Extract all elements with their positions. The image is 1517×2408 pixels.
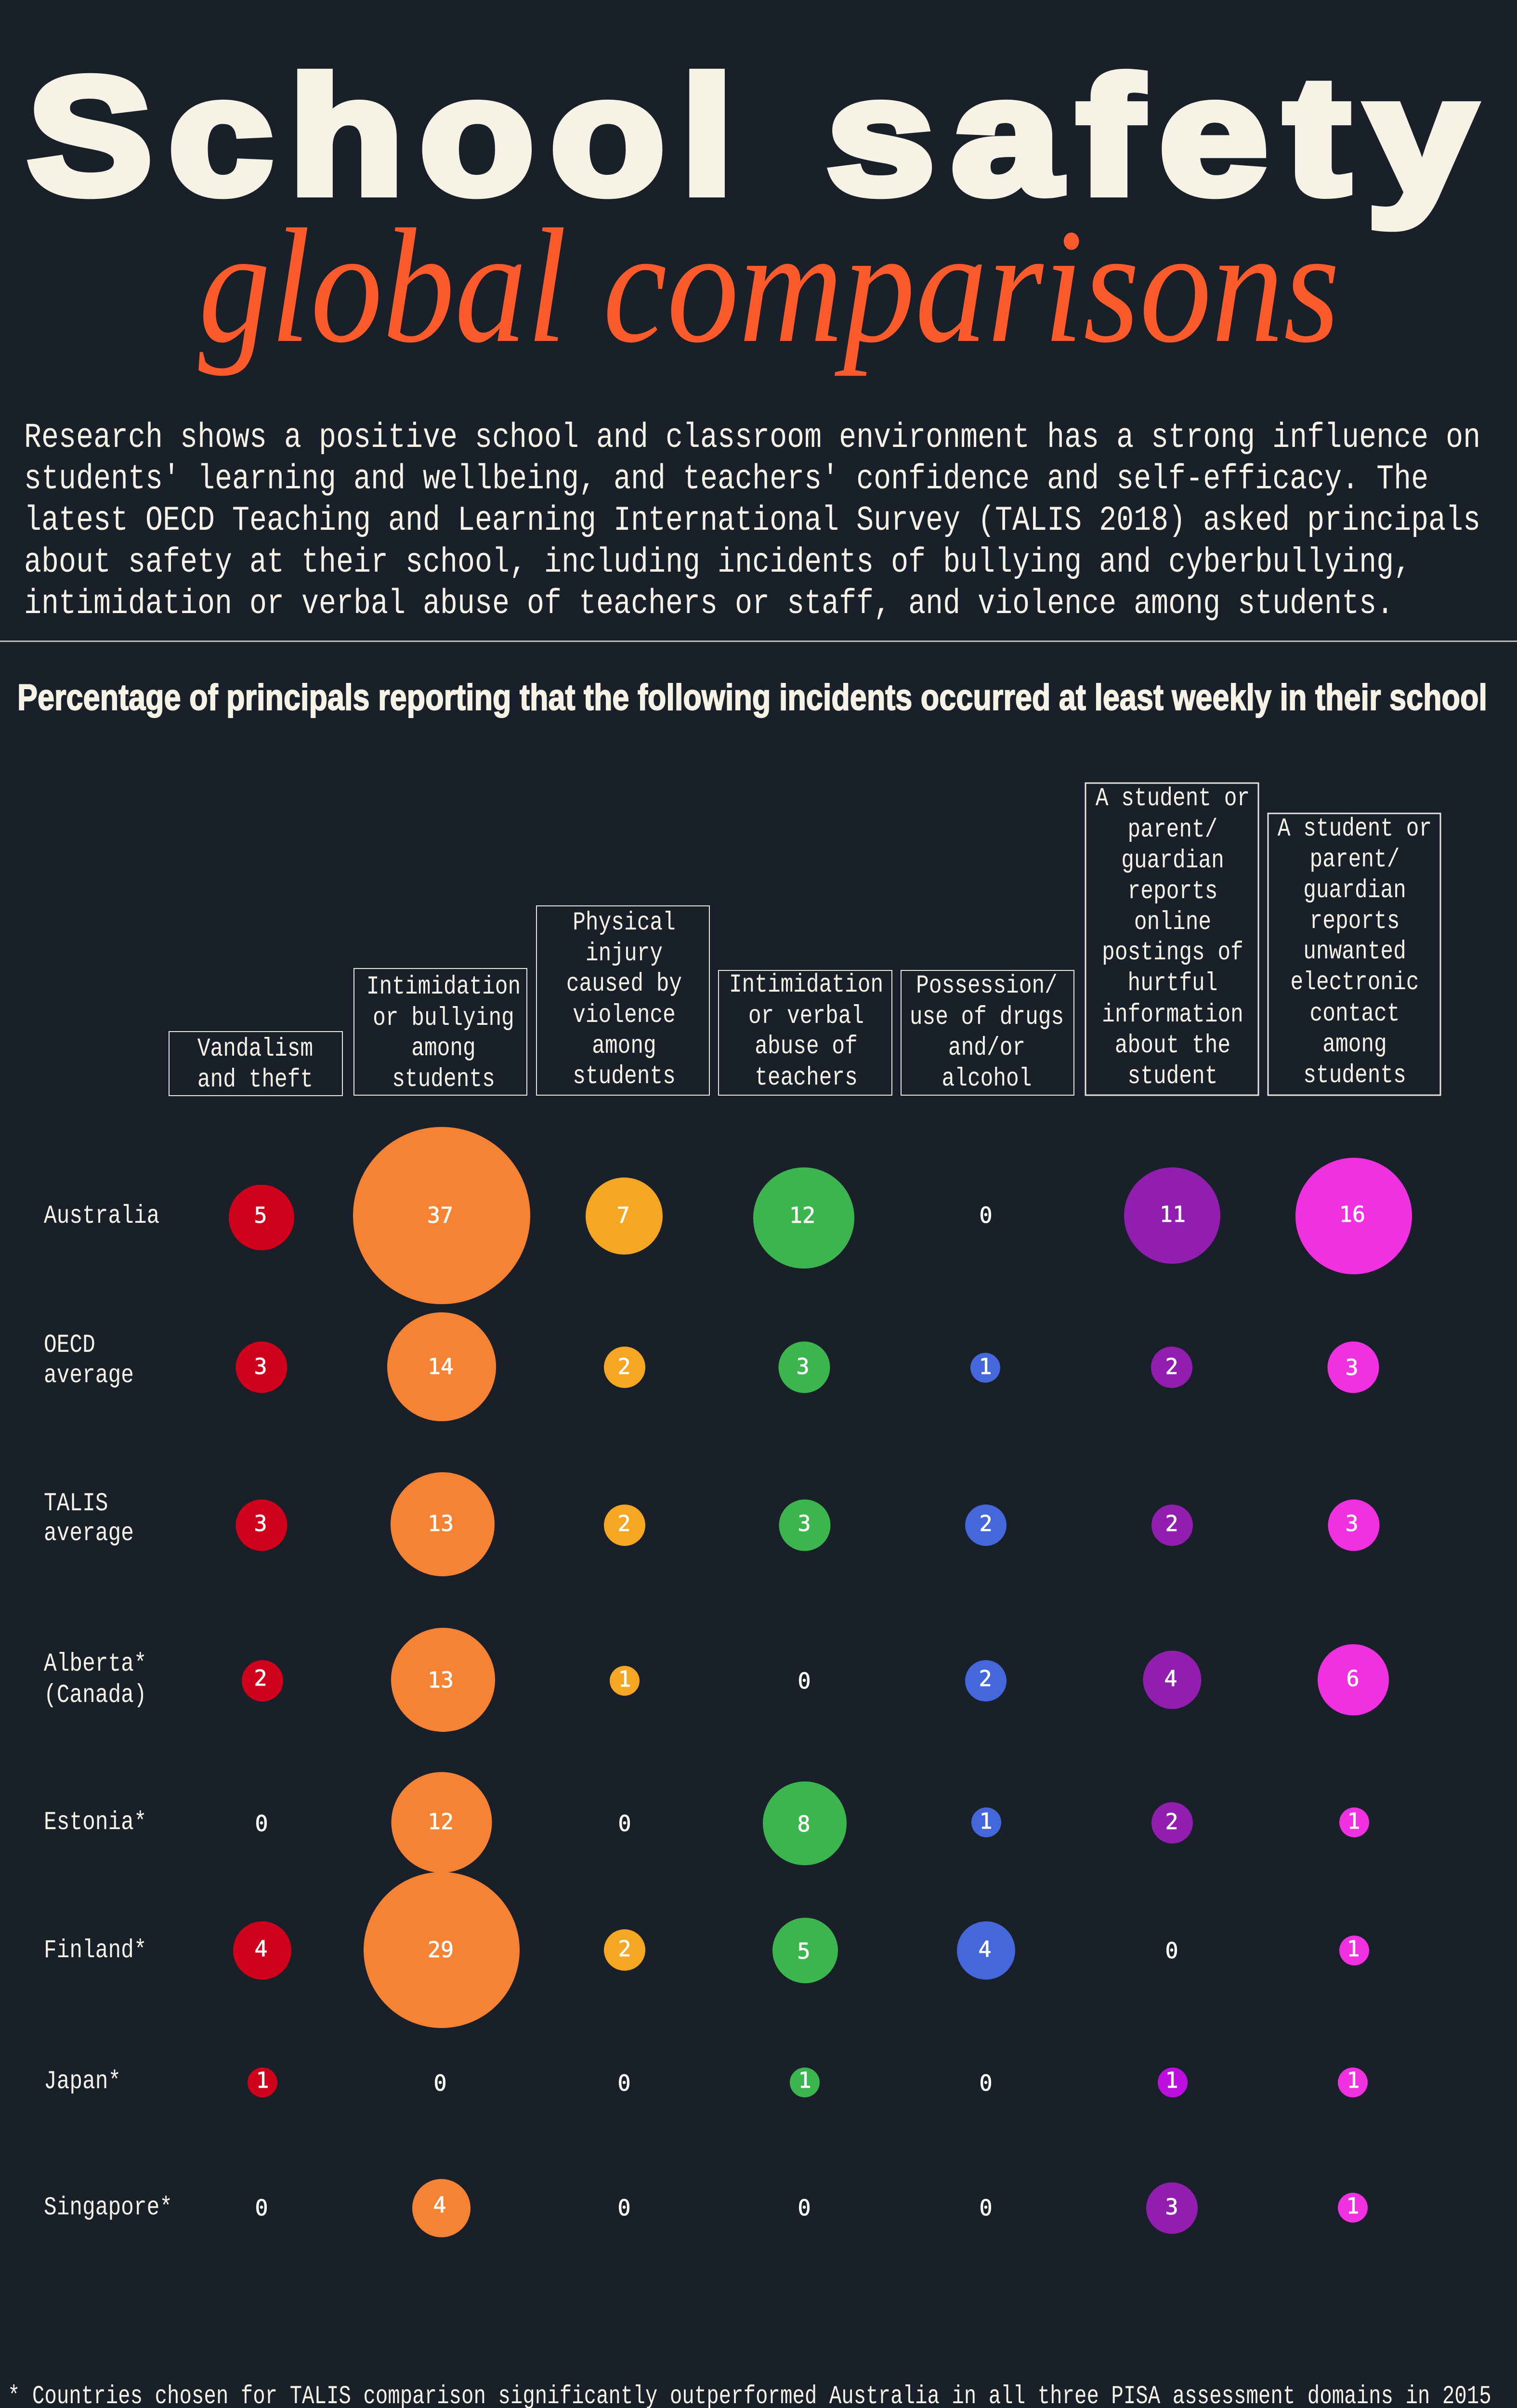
column header: electronic contact: parent/ bbox=[1310, 845, 1399, 874]
row: TALIS average bbox=[44, 1472, 1379, 1576]
row: Finland: Finland* bbox=[44, 1936, 147, 1965]
column header: drugs and alcohol: use of drugs bbox=[910, 1002, 1064, 1032]
title: School bbox=[27, 43, 749, 228]
row: Finland: 5 bbox=[797, 1938, 811, 1964]
column header: vandalism: and theft bbox=[197, 1065, 313, 1094]
column header: electronic contact: reports bbox=[1310, 906, 1399, 936]
column header: online postings: online bbox=[1134, 907, 1211, 937]
column header: intimidation among students: Intimidation bbox=[366, 972, 521, 1001]
row: TALIS average: TALIS bbox=[44, 1489, 108, 1518]
row: Australia: 16 bbox=[1339, 1202, 1365, 1227]
column header: electronic contact: A student or bbox=[1278, 814, 1432, 843]
row: Australia bbox=[44, 1127, 1412, 1304]
row: Finland: 1 bbox=[1347, 1936, 1360, 1962]
row: Estonia: 1 bbox=[979, 1808, 993, 1834]
column header: intimidation among students: among bbox=[411, 1034, 476, 1063]
row: Singapore: 0 bbox=[979, 2195, 993, 2221]
row: Japan bbox=[44, 2067, 1368, 2097]
row: Finland: 4 bbox=[254, 1936, 268, 1962]
row: Japan: 0 bbox=[433, 2070, 447, 2096]
row: Japan: 0 bbox=[979, 2070, 993, 2096]
column header: abuse of teachers: teachers bbox=[755, 1063, 858, 1092]
row: Finland: 4 bbox=[978, 1937, 992, 1962]
row: OECD average: 1 bbox=[979, 1354, 992, 1379]
intro text block: Research shows a positive school and classroom environment has a strong influence on bbox=[24, 418, 1480, 458]
row: Singapore: 1 bbox=[1346, 2193, 1360, 2219]
row: Alberta (Canada): 1 bbox=[618, 1666, 631, 1692]
row: Australia: 37 bbox=[427, 1203, 453, 1228]
column header: online postings: postings of bbox=[1102, 938, 1243, 967]
column header: drugs and alcohol: alcohol bbox=[942, 1064, 1032, 1093]
row: OECD average: 2 bbox=[617, 1354, 631, 1379]
row: Alberta (Canada): 13 bbox=[428, 1667, 454, 1693]
row: Alberta (Canada): Alberta* bbox=[44, 1649, 147, 1678]
row: Finland: 29 bbox=[428, 1937, 454, 1963]
row: TALIS average: 3 bbox=[1345, 1511, 1359, 1536]
intro text block: intimidation or verbal abuse of teachers or staff, and violence among students. bbox=[24, 584, 1394, 624]
row: Estonia bbox=[44, 1772, 1369, 1872]
column header: vandalism: Vandalism bbox=[197, 1034, 313, 1063]
row: OECD average: 14 bbox=[428, 1354, 454, 1379]
intro text block: students' learning and wellbeing, and teachers' confidence and self-efficacy. The bbox=[24, 459, 1428, 499]
row: Estonia: 8 bbox=[797, 1811, 811, 1837]
row: Singapore: 4 bbox=[433, 2192, 446, 2218]
column header: online postings: A student or bbox=[1096, 784, 1250, 813]
column header: vandalism bbox=[169, 1032, 342, 1096]
row: Singapore: 0 bbox=[255, 2195, 268, 2221]
column header: abuse of teachers: abuse of bbox=[755, 1032, 858, 1061]
row: Australia: 7 bbox=[616, 1203, 630, 1228]
column header: abuse of teachers bbox=[719, 970, 892, 1095]
title bbox=[27, 43, 1492, 229]
column header: online postings: hurtful bbox=[1128, 968, 1217, 998]
row: OECD average: 3 bbox=[254, 1354, 267, 1379]
row: Estonia: Estonia* bbox=[44, 1807, 147, 1837]
row: Japan: 1 bbox=[1165, 2068, 1178, 2093]
column header: online postings bbox=[1085, 783, 1258, 1095]
row: Estonia: 0 bbox=[255, 1811, 268, 1836]
column header: abuse of teachers: Intimidation bbox=[729, 970, 883, 999]
row: Finland: 2 bbox=[618, 1936, 631, 1962]
column header: drugs and alcohol bbox=[901, 970, 1074, 1095]
row: OECD average: average bbox=[44, 1361, 134, 1390]
column header: physical injury: students bbox=[573, 1061, 676, 1091]
column header: electronic contact: electronic bbox=[1291, 968, 1419, 997]
row: TALIS average: 3 bbox=[254, 1511, 267, 1536]
intro text block: latest OECD Teaching and Learning International Survey (TALIS 2018) asked principals bbox=[24, 501, 1480, 540]
row: TALIS average: 13 bbox=[428, 1511, 454, 1536]
row: Estonia: 0 bbox=[618, 1811, 631, 1836]
column header: electronic contact: students bbox=[1303, 1060, 1406, 1090]
row: Alberta (Canada): 2 bbox=[979, 1666, 992, 1691]
row: Alberta (Canada): 6 bbox=[1346, 1666, 1360, 1691]
column header: online postings: guardian bbox=[1121, 846, 1224, 875]
column headers bbox=[169, 783, 1440, 1096]
row: Finland bbox=[44, 1872, 1369, 2028]
row: Japan: 1 bbox=[256, 2068, 269, 2093]
column header: physical injury: among bbox=[592, 1031, 656, 1060]
column header: intimidation among students: or bullying bbox=[373, 1003, 514, 1033]
column header: physical injury: caused by bbox=[566, 969, 682, 998]
row: Australia: 5 bbox=[254, 1203, 267, 1228]
column header: online postings: reports bbox=[1128, 877, 1217, 906]
row: Australia: Australia bbox=[44, 1201, 159, 1230]
row: Singapore: 3 bbox=[1165, 2194, 1178, 2220]
intro text block: about safety at their school, including incidents of bullying and cyberbullying, bbox=[24, 543, 1411, 582]
row: Alberta (Canada): 2 bbox=[254, 1665, 267, 1691]
column header: online postings: information bbox=[1102, 1000, 1243, 1029]
row: TALIS average: 3 bbox=[798, 1511, 811, 1536]
column header: physical injury: violence bbox=[573, 1000, 676, 1030]
row: Singapore: 0 bbox=[798, 2195, 811, 2221]
row: TALIS average: average bbox=[44, 1518, 134, 1548]
column header: intimidation among students: students bbox=[392, 1064, 495, 1094]
column header: electronic contact bbox=[1268, 813, 1440, 1095]
row: Australia: 0 bbox=[979, 1203, 993, 1228]
row: Alberta (Canada): (Canada) bbox=[44, 1680, 147, 1710]
row: Alberta (Canada): 4 bbox=[1164, 1666, 1177, 1691]
title: safety bbox=[826, 43, 1492, 229]
subtitle: global comparisons bbox=[198, 195, 1340, 377]
column header: physical injury bbox=[536, 906, 709, 1095]
row: TALIS average: 2 bbox=[1165, 1511, 1178, 1536]
row: Japan: 1 bbox=[1347, 2068, 1360, 2093]
row: Alberta (Canada): 0 bbox=[798, 1668, 811, 1694]
row: OECD average: 3 bbox=[796, 1354, 810, 1379]
column header: electronic contact: unwanted bbox=[1303, 937, 1406, 966]
row: OECD average: 3 bbox=[1345, 1355, 1359, 1380]
row: OECD average bbox=[44, 1312, 1379, 1421]
row: Alberta (Canada) bbox=[44, 1628, 1389, 1732]
column header: physical injury: Physical bbox=[573, 908, 676, 937]
row: Estonia: 12 bbox=[428, 1809, 454, 1834]
row: Estonia: 2 bbox=[1165, 1809, 1178, 1834]
row: OECD average: 2 bbox=[1165, 1354, 1178, 1379]
column header: drugs and alcohol: Possession/ bbox=[916, 971, 1058, 1000]
row: OECD average: OECD bbox=[44, 1330, 95, 1360]
row: Japan: 0 bbox=[617, 2070, 631, 2096]
column header: online postings: about the bbox=[1115, 1031, 1230, 1060]
row: Estonia: 1 bbox=[1347, 1808, 1360, 1834]
column header: online postings: student bbox=[1128, 1061, 1217, 1091]
row: TALIS average: 2 bbox=[617, 1511, 631, 1536]
bubble chart bbox=[44, 1127, 1412, 2238]
row: Singapore bbox=[44, 2179, 1368, 2238]
column header: electronic contact: contact bbox=[1310, 999, 1399, 1028]
column header: intimidation among students bbox=[354, 968, 527, 1095]
row: Australia: 11 bbox=[1160, 1202, 1186, 1227]
column header: online postings: parent/ bbox=[1128, 815, 1217, 844]
column header: electronic contact: guardian bbox=[1303, 876, 1406, 905]
row: Finland: 0 bbox=[1165, 1938, 1178, 1963]
row: Singapore: Singapore* bbox=[44, 2193, 172, 2222]
row: TALIS average: 2 bbox=[979, 1511, 993, 1536]
column header: abuse of teachers: or verbal bbox=[748, 1001, 864, 1031]
row: Japan: 1 bbox=[798, 2068, 811, 2093]
column header: drugs and alcohol: and/or bbox=[948, 1033, 1025, 1062]
row: Japan: Japan* bbox=[44, 2067, 121, 2096]
row: Australia: 12 bbox=[789, 1203, 815, 1228]
column header: physical injury: injury bbox=[586, 939, 663, 968]
row: Singapore: 0 bbox=[617, 2195, 631, 2221]
column header: electronic contact: among bbox=[1322, 1030, 1387, 1059]
intro text block bbox=[24, 418, 1480, 624]
